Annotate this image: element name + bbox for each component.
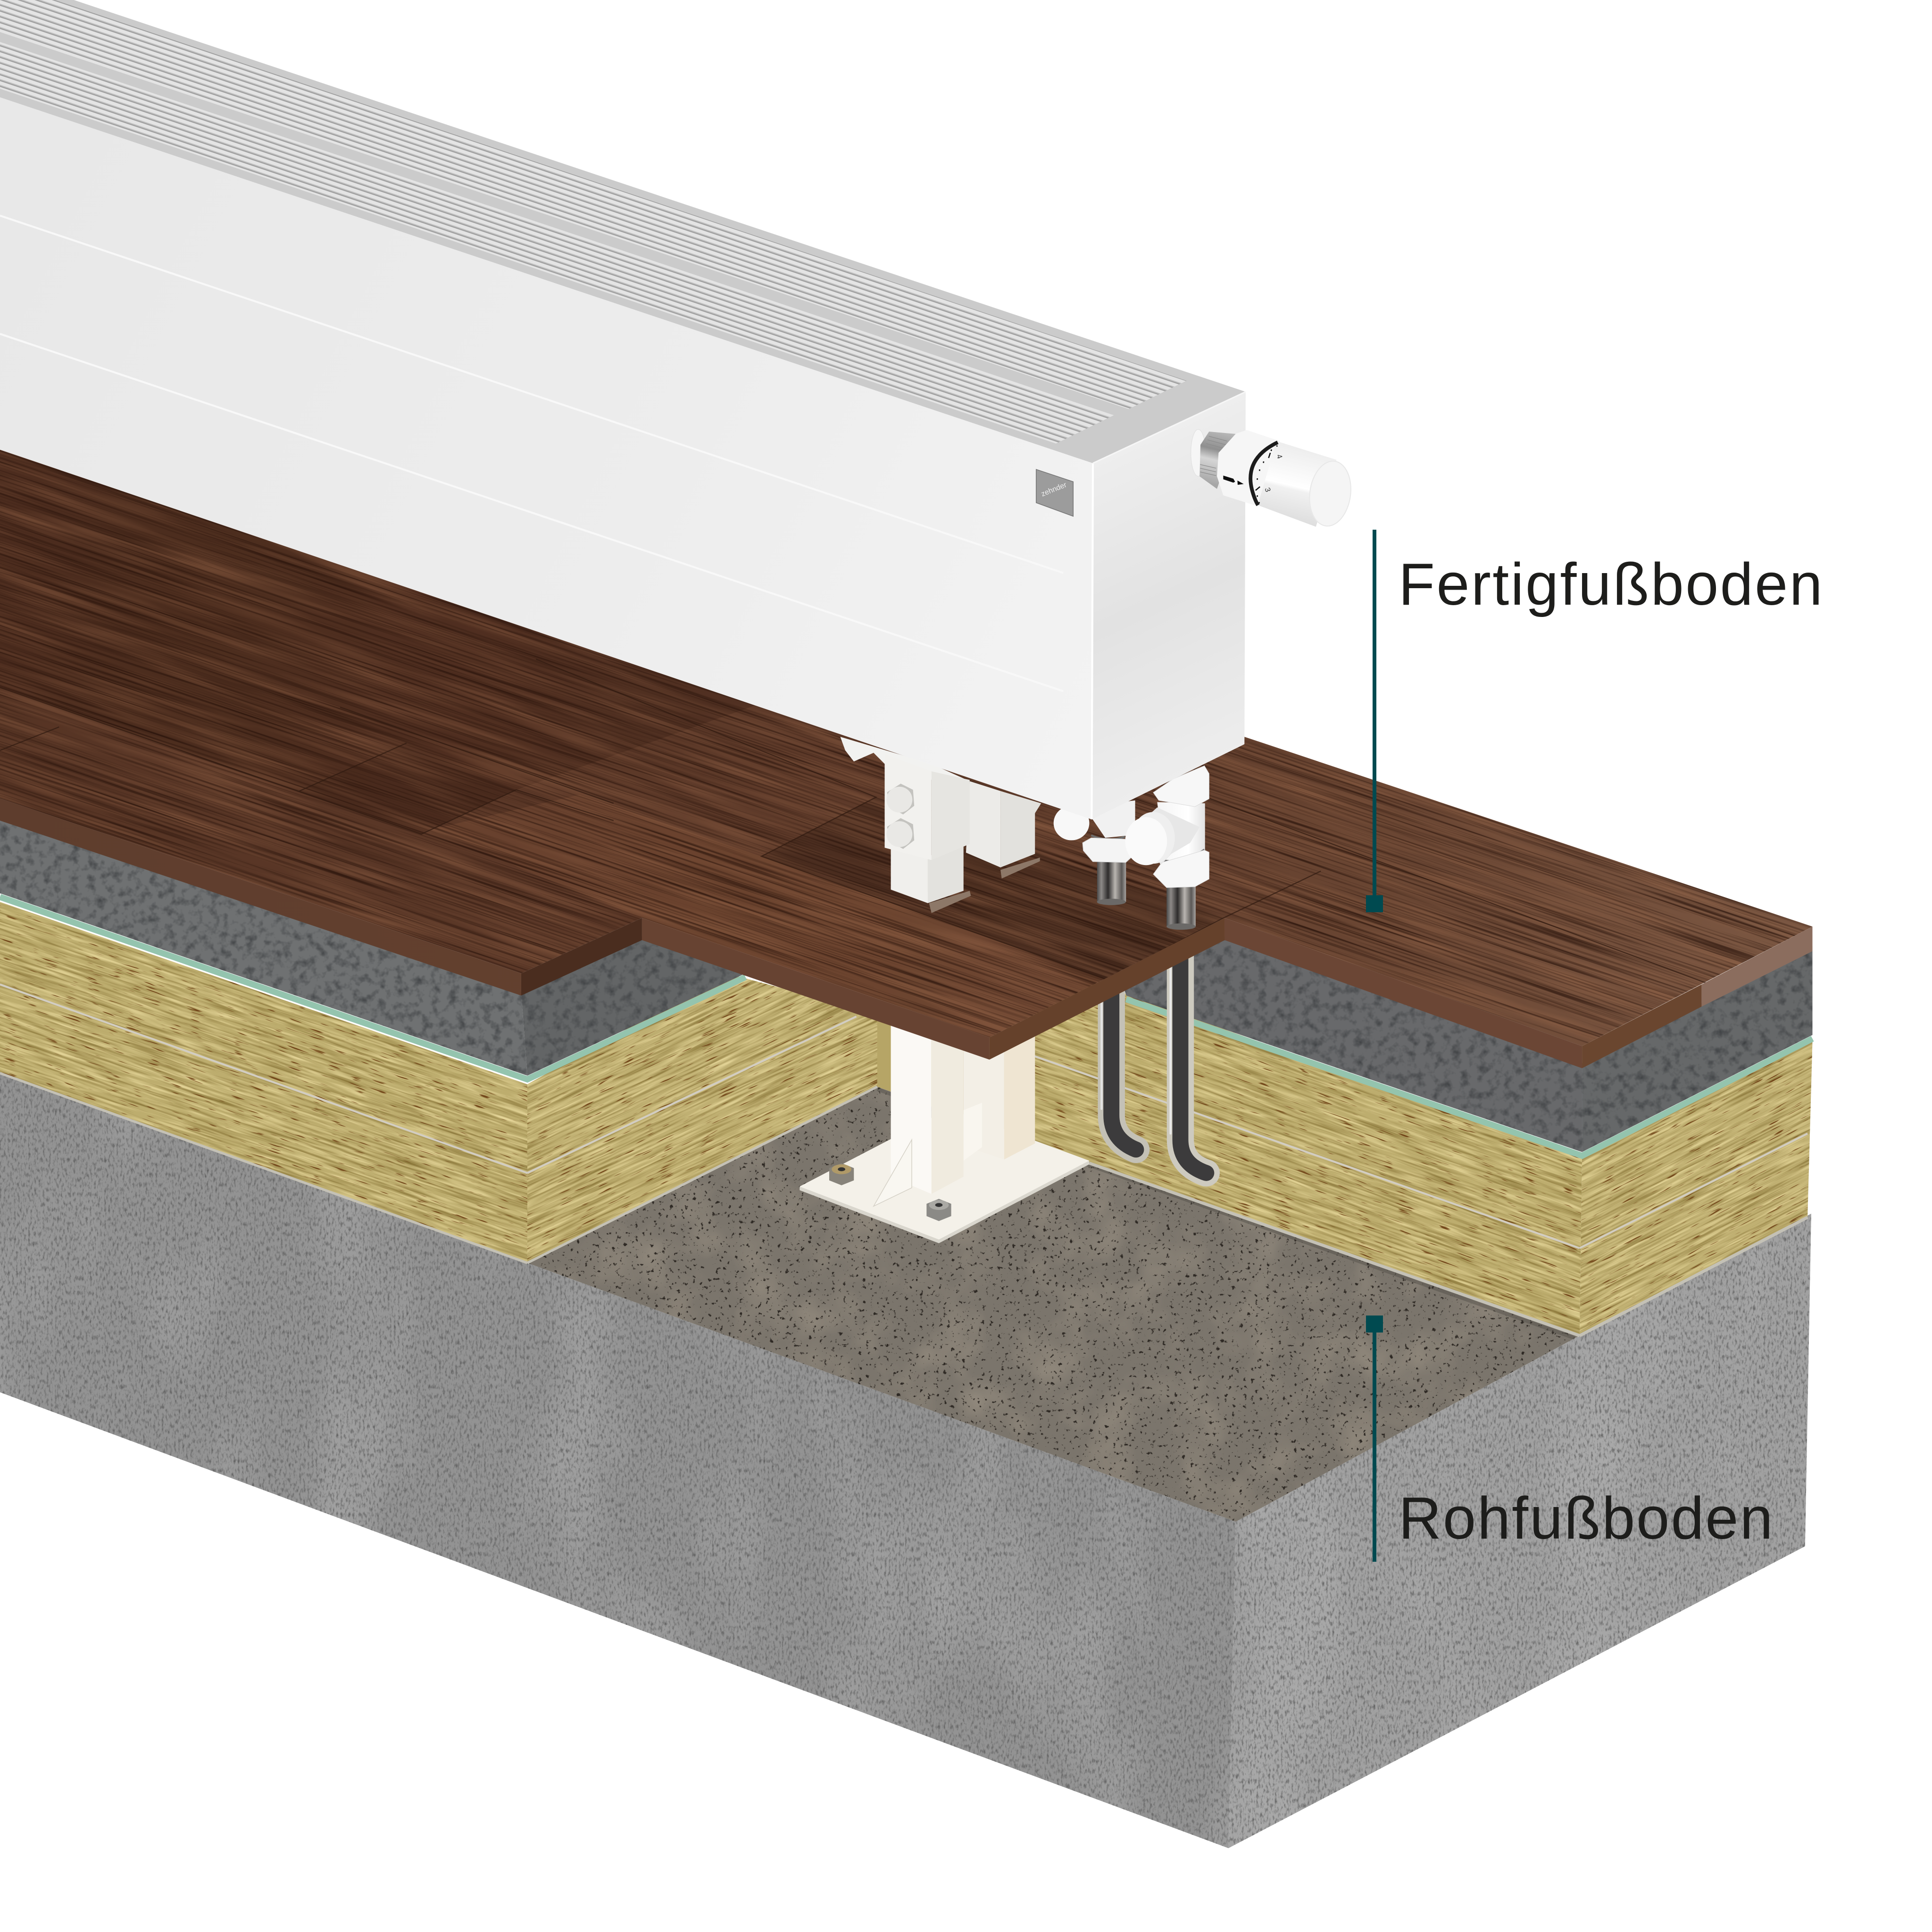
pipe left [1101,974,1136,1149]
logo badge [1036,469,1073,516]
recess floor surface [524,1082,1583,1525]
thermostat head [1191,429,1355,529]
scale ticks [1256,445,1277,503]
rear upper post [966,781,1041,867]
chrome pipe stubs [1097,860,1196,930]
leader marker top [1366,895,1383,912]
foil layer [1126,999,1813,1156]
mineral wool end face [524,890,893,1277]
left insulation and screed block [0,813,893,1279]
valve cap [1125,808,1199,865]
leader marker bottom [1366,1316,1383,1332]
wood edge bands [0,799,1813,1068]
concrete right face [1228,1214,1811,1848]
left elbow valve [1054,800,1135,863]
leader line bottom [1373,1325,1376,1562]
thermostat base [1191,429,1206,476]
gusset [874,1140,912,1206]
radiator side panel [1091,392,1246,819]
setting marker [1223,475,1244,485]
screed end face [521,936,745,1075]
label top: Fertigfußboden [1399,551,1824,617]
recess back wall [877,1004,1035,1143]
scale ring [1250,442,1278,505]
mineral wool front face [1029,941,1590,1361]
right valve body [1153,766,1209,888]
thermostat ring [1217,430,1280,506]
sleeve bolts [886,783,914,849]
anchor bolt left [829,1163,854,1185]
radiator [0,0,1355,819]
plank tones [0,446,1224,1037]
dial numbers [1263,453,1283,493]
upper stand on the floor [841,737,1041,913]
lower supply pipes [1101,949,1206,1173]
pipe right [1171,949,1206,1173]
foil layer [0,897,745,1079]
concrete left face [0,1072,1236,1848]
stand shadows on floor [929,891,971,913]
callout: Rohfußboden [1366,1316,1774,1562]
plank seams [0,659,1710,984]
floor stand: base plate and lower posts [799,986,1089,1243]
anchor bolt right [926,1199,951,1221]
wood top surface [0,446,1813,1046]
rear post [964,986,1004,1159]
thermostat collar [1199,432,1236,489]
logo badge: zehnder [1040,481,1068,498]
concrete base slab (Rohfußboden) [0,1059,1817,1860]
upper pipes and valves [1054,766,1209,930]
dial numbers: 4 [1274,453,1283,460]
screed faces [1109,936,1582,1152]
mineral wool end face [1574,1016,1815,1348]
wood floor (Fertigfußboden) [0,246,1824,1501]
thermostat cap [1258,441,1336,527]
dial numbers: 3 [1263,487,1272,493]
front sleeve [885,754,970,860]
label bottom: Rohfußboden [1399,1485,1774,1551]
radiator front panel [0,97,1093,819]
callout: Fertigfußboden [1366,530,1824,912]
inner bracket [964,1103,982,1161]
bracket [841,737,970,789]
front post [891,986,932,1194]
right insulation and screed block [0,807,1817,1361]
mineral wool front face [0,887,542,1279]
screed front face [0,813,527,1075]
front inner tube [891,844,964,903]
leader line top [1373,530,1376,902]
base plate [799,1109,1089,1243]
radiator top grille [0,0,1246,463]
